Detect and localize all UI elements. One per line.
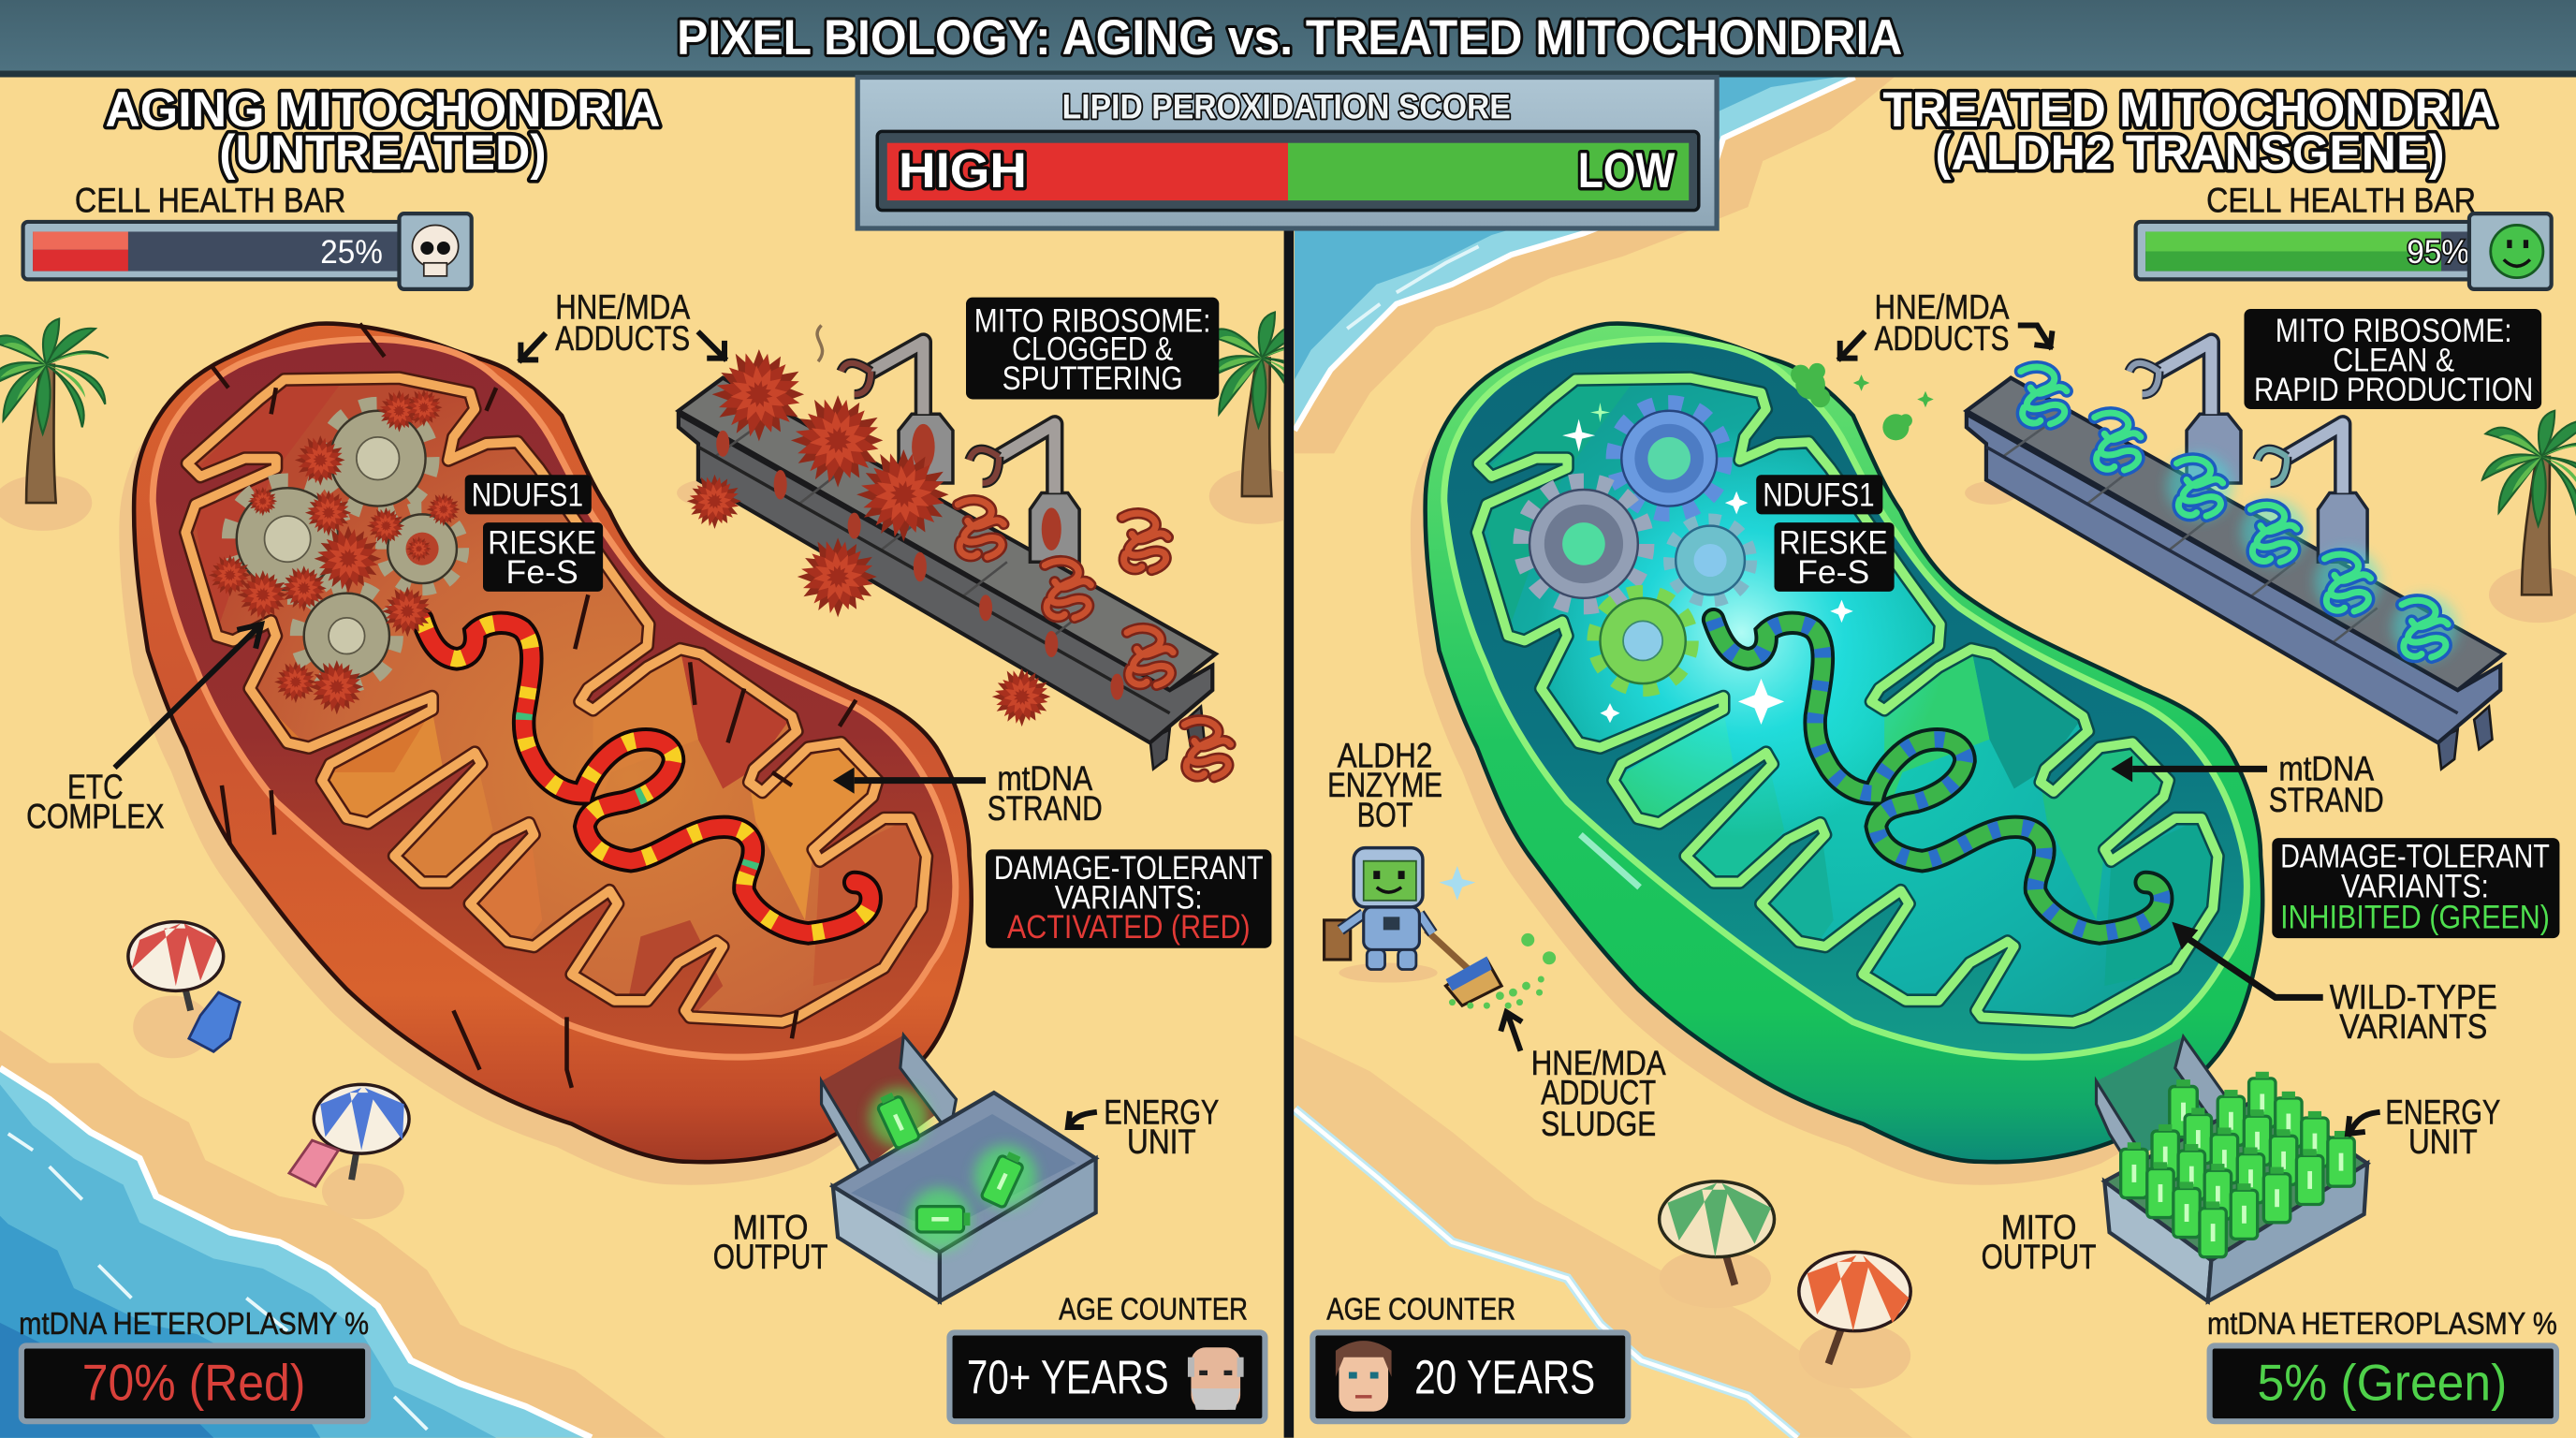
cell health bar: aging [23, 181, 472, 289]
callout: ribosome treated: CLEAN & [2333, 343, 2454, 379]
callout: ribosome treated [2244, 309, 2541, 409]
score label: LIPID PEROXIDATION SCORE [1062, 87, 1511, 125]
label: HNE/MDA adducts aging: ADDUCTS [555, 319, 690, 358]
callout: Rieske treated: Fe-S [1797, 554, 1869, 591]
palm tree left 1 [0, 318, 109, 531]
healthy ETC gears [1523, 404, 1749, 688]
callout: Rieske aging [483, 522, 603, 592]
sparkles [1562, 403, 1853, 725]
centre divider [1284, 213, 1294, 1438]
heteroplasmy: aging: 70% (Red) [82, 1354, 305, 1411]
callout: Rieske aging: Fe-S [506, 554, 578, 591]
label: ALDH2 enzyme bot [1327, 737, 1442, 834]
label: ETC complex: ETC [67, 768, 124, 806]
label: mtDNA strand aging: mtDNA [997, 759, 1093, 798]
floor facets [189, 378, 929, 1019]
adduct clumps on gears [207, 388, 461, 717]
callout: damage-tolerant treated [2272, 838, 2559, 938]
floor facets and glow [1480, 378, 2221, 986]
adduct clumps on belt [684, 345, 1053, 729]
mtDNA strand [422, 620, 871, 933]
heading: aging [105, 82, 661, 181]
heading: aging: (UNTREATED) [219, 125, 547, 181]
icon: smile [2469, 213, 2552, 289]
label: HNE/MDA adducts treated [1840, 287, 2052, 359]
ETC gears clogged [207, 388, 461, 717]
label: energy unit aging [1068, 1093, 1219, 1161]
callout: ribosome treated: MITO RIBOSOME: [2276, 313, 2512, 349]
label: mtDNA strand treated: mtDNA [2278, 750, 2374, 788]
conveyor: clogged mito ribosome [677, 326, 1231, 777]
cracks [212, 324, 856, 1088]
palm tree right [2482, 411, 2576, 623]
heteroplasmy: aging: mtDNA HETEROPLASMY % [19, 1307, 369, 1342]
pink chair [289, 1140, 339, 1186]
label: mito output aging: OUTPUT [713, 1238, 828, 1276]
score bar [877, 131, 1699, 211]
label: wild-type variants [2172, 922, 2497, 1046]
robot arm 1 [2130, 342, 2241, 483]
cell health bar: treated [2136, 181, 2552, 289]
robot arm 2 [2258, 424, 2367, 562]
robot arm 2 [970, 424, 1079, 562]
cell health bar: treated: CELL HEALTH BAR [2206, 181, 2476, 219]
degraded protein strands [958, 500, 1231, 777]
age counter: aging: AGE COUNTER [1059, 1292, 1248, 1327]
robot arm 1 [842, 342, 953, 483]
label: energy unit aging: UNIT [1127, 1123, 1196, 1161]
score bar: HIGH [899, 143, 1027, 198]
callout: damage-tolerant aging: DAMAGE-TOLERANT [994, 850, 1264, 887]
age counter: aging [949, 1292, 1265, 1421]
heteroplasmy: aging [19, 1307, 369, 1421]
callout: ribosome treated: RAPID PRODUCTION [2254, 372, 2533, 408]
callout: ribosome aging [966, 298, 1219, 399]
label: ALDH2 enzyme bot: ALDH2 [1338, 737, 1432, 775]
label: HNE/MDA adducts aging: HNE/MDA [555, 287, 690, 326]
inner membrane folds [1477, 378, 2217, 1022]
right panel: ocean top and wet sand [1295, 77, 1912, 1438]
heading: aging: AGING MITOCHONDRIA [105, 82, 661, 138]
inner membrane folds [185, 378, 927, 1022]
label: mito output aging [713, 1208, 828, 1276]
icon: ALDH2 enzyme bot [1325, 848, 1556, 1009]
label: mtDNA strand treated: STRAND [2269, 781, 2384, 819]
label: mito output treated: OUTPUT [1982, 1238, 2097, 1276]
label: mtDNA strand treated [2111, 750, 2384, 819]
heading: treated: (ALDH2 TRANSGENE) [1936, 125, 2445, 181]
label: HNE/MDA adducts treated: ADDUCTS [1875, 319, 2009, 358]
header bar [0, 0, 2576, 77]
heading: treated: TREATED MITOCHONDRIA [1882, 82, 2497, 138]
score bar: LOW [1578, 143, 1676, 198]
cell health bar: treated: 95% [2407, 234, 2469, 271]
label: ALDH2 enzyme bot: ENZYME [1327, 766, 1442, 804]
callout: ribosome aging: CLOGGED & [1012, 330, 1173, 367]
age counter: treated [1312, 1292, 1628, 1421]
label: wild-type variants: WILD-TYPE [2330, 978, 2497, 1017]
label: energy unit aging: ENERGY [1104, 1093, 1219, 1131]
callout: ribosome aging: SPUTTERING [1003, 360, 1183, 397]
age counter: treated: AGE COUNTER [1326, 1292, 1515, 1327]
battery icons [869, 1088, 1036, 1251]
age counter: treated: 20 YEARS [1414, 1350, 1595, 1403]
label: mito output aging: MITO [733, 1208, 809, 1246]
blue chair [189, 992, 240, 1051]
cell health bar: aging: 25% [320, 234, 383, 271]
callout: NDUFS1 treated: NDUFS1 [1763, 477, 1875, 514]
callout: damage-tolerant treated: VARIANTS: [2341, 868, 2489, 904]
umbrella: red beach [128, 922, 240, 1058]
label: energy unit treated: UNIT [2408, 1123, 2478, 1161]
callout: damage-tolerant aging: ACTIVATED (RED) [1007, 909, 1251, 946]
clean protein knots [2021, 367, 2458, 661]
adduct sludge [1449, 933, 1556, 1009]
callout: damage-tolerant aging: VARIANTS: [1055, 880, 1203, 917]
battery stack [2121, 1072, 2354, 1257]
callout: NDUFS1 aging: NDUFS1 [472, 477, 583, 514]
rust stains [716, 431, 1123, 700]
heading: treated [1882, 82, 2497, 181]
label: adduct sludge: SLUDGE [1541, 1105, 1656, 1143]
callout: ribosome aging: MITO RIBOSOME: [974, 303, 1211, 340]
label: wild-type variants: VARIANTS [2339, 1007, 2487, 1046]
label: HNE/MDA adducts aging [520, 287, 724, 360]
conveyor: clean mito ribosome [1965, 342, 2504, 769]
label: adduct sludge [1501, 1012, 1666, 1143]
label: ETC complex [26, 624, 261, 836]
umbrella: green beach [1660, 1181, 1775, 1308]
label: adduct sludge: HNE/MDA [1531, 1044, 1666, 1082]
umbrella: blue beach [289, 1084, 409, 1219]
callout: Rieske treated: RIESKE [1779, 524, 1888, 561]
callout: Rieske aging: RIESKE [488, 524, 596, 561]
icon: skull [399, 213, 472, 289]
cell health bar: aging: CELL HEALTH BAR [75, 181, 345, 219]
panel: lipid peroxidation score [857, 77, 1717, 228]
label: energy unit treated [2348, 1093, 2500, 1161]
callout: damage-tolerant aging [986, 849, 1271, 948]
label: mtDNA strand aging [833, 759, 1103, 828]
mtDNA strand [1714, 620, 2162, 933]
panel: treated mitochondrion [1411, 324, 2262, 1185]
label: adduct sludge: ADDUCT [1541, 1073, 1656, 1111]
title: PIXEL BIOLOGY: AGING vs. TREATED MITOCHONDRIA [677, 10, 1902, 66]
label: mito output treated [1982, 1208, 2097, 1276]
heteroplasmy: treated [2207, 1307, 2557, 1421]
green adduct blobs [1791, 363, 1934, 440]
label: ALDH2 enzyme bot: BOT [1357, 796, 1412, 834]
energy output crate: treated [2097, 1036, 2367, 1301]
callout: Rieske treated [1775, 522, 1895, 592]
age counter: aging: 70+ YEARS [967, 1350, 1169, 1403]
umbrella: orange beach [1799, 1252, 1910, 1388]
icon: young face [1336, 1341, 1392, 1412]
energy output crate: aging [822, 1035, 1096, 1301]
label: HNE/MDA adducts treated: HNE/MDA [1875, 287, 2010, 326]
heteroplasmy: treated: 5% (Green) [2258, 1354, 2507, 1411]
label: ETC complex: COMPLEX [26, 798, 165, 836]
label: mtDNA strand aging: STRAND [988, 789, 1103, 828]
icon: old man face [1188, 1347, 1244, 1410]
palm tree left 2 [1209, 311, 1284, 524]
label: energy unit treated: ENERGY [2385, 1093, 2500, 1131]
label: mito output treated: MITO [2001, 1208, 2076, 1246]
left panel: ocean shoreline [0, 1030, 666, 1438]
